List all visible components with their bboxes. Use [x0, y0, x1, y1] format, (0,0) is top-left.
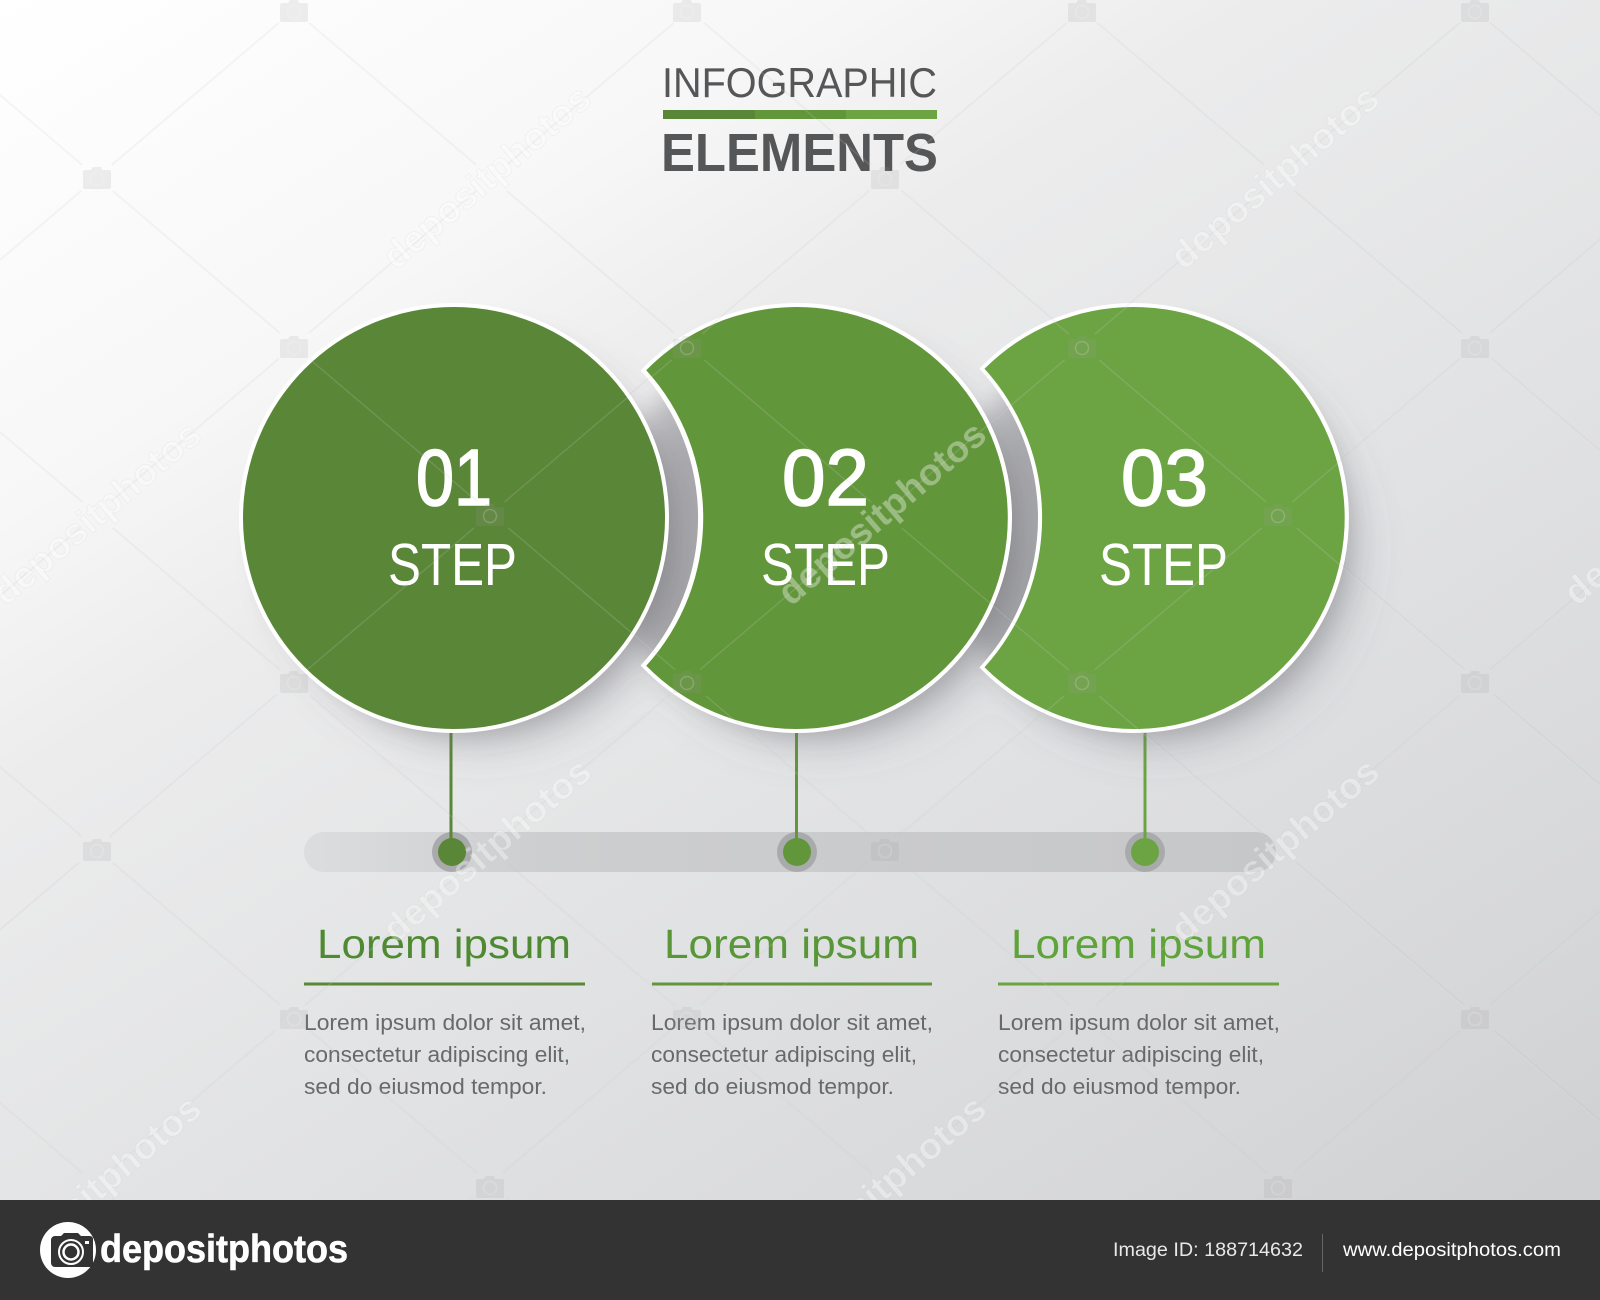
connector stems and timeline dots: [432, 733, 1165, 872]
watermark wordmarks: depositphotos: [770, 413, 994, 613]
watermark wordmarks: depositphotos: [770, 1087, 994, 1287]
column 2 body: consectetur adipiscing elit,: [651, 1042, 917, 1067]
step 1 number: 01: [416, 433, 492, 522]
marker 1: [432, 733, 472, 872]
wide soft circle shadows: [284, 352, 1356, 744]
title: infographic elements: [661, 59, 938, 183]
step 2 label: STEP: [761, 532, 890, 598]
column 3 body: Lorem ipsum dolor sit amet,: [998, 1010, 1280, 1035]
watermark wordmarks: depositphotos: [1163, 77, 1387, 277]
step 2 crescent: [641, 303, 1012, 733]
column 3 text: [998, 921, 1280, 1099]
marker 2: [777, 733, 817, 872]
title line: ELEMENTS: ELEMENTS: [661, 123, 938, 183]
watermark wordmarks: depositphotos: [375, 77, 599, 277]
column 3 body: sed do eiusmod tempor.: [998, 1074, 1241, 1099]
step labels: [388, 433, 1228, 598]
step 3 number: 03: [1121, 433, 1208, 522]
title line: INFOGRAPHIC: INFOGRAPHIC: [662, 59, 937, 106]
column 1 heading: Lorem ipsum: [317, 921, 571, 967]
column 3 heading: Lorem ipsum: [1011, 921, 1266, 967]
marker 3: [1125, 733, 1165, 872]
column 2 text: [651, 921, 933, 1099]
step 1 circle: [239, 303, 669, 733]
column 1 text: [304, 921, 586, 1099]
tight circle shadows: [266, 332, 1350, 736]
step 3 crescent: [979, 303, 1349, 733]
column 2 body: [651, 1010, 933, 1099]
watermark wordmarks: depositphotos: [375, 750, 599, 950]
column 1 body: consectetur adipiscing elit,: [304, 1042, 570, 1067]
column 2 heading: Lorem ipsum: [664, 921, 919, 967]
column 3 body: consectetur adipiscing elit,: [998, 1042, 1264, 1067]
column 1 body: sed do eiusmod tempor.: [304, 1074, 547, 1099]
logo wordmark: depositphotos: [100, 1228, 348, 1271]
column 3 body: [998, 1010, 1280, 1099]
step 2 number: 02: [782, 433, 869, 522]
column 1 body: Lorem ipsum dolor sit amet,: [304, 1010, 586, 1035]
image id: Image ID: 188714632: [1113, 1239, 1303, 1261]
footer bar: [0, 1200, 1600, 1300]
icon: camera logo: [40, 1222, 96, 1278]
timeline track: [304, 832, 1276, 872]
watermark wordmarks: depositphotos: [1163, 750, 1387, 950]
title colour bar: [663, 110, 937, 119]
step 3 label: STEP: [1099, 532, 1228, 598]
column 1 body: [304, 1010, 586, 1099]
column 2 body: Lorem ipsum dolor sit amet,: [651, 1010, 933, 1035]
step 1 label: STEP: [388, 532, 517, 598]
website url: www.depositphotos.com: [1342, 1239, 1561, 1261]
column 2 body: sed do eiusmod tempor.: [651, 1074, 894, 1099]
step circles: [239, 303, 1356, 744]
